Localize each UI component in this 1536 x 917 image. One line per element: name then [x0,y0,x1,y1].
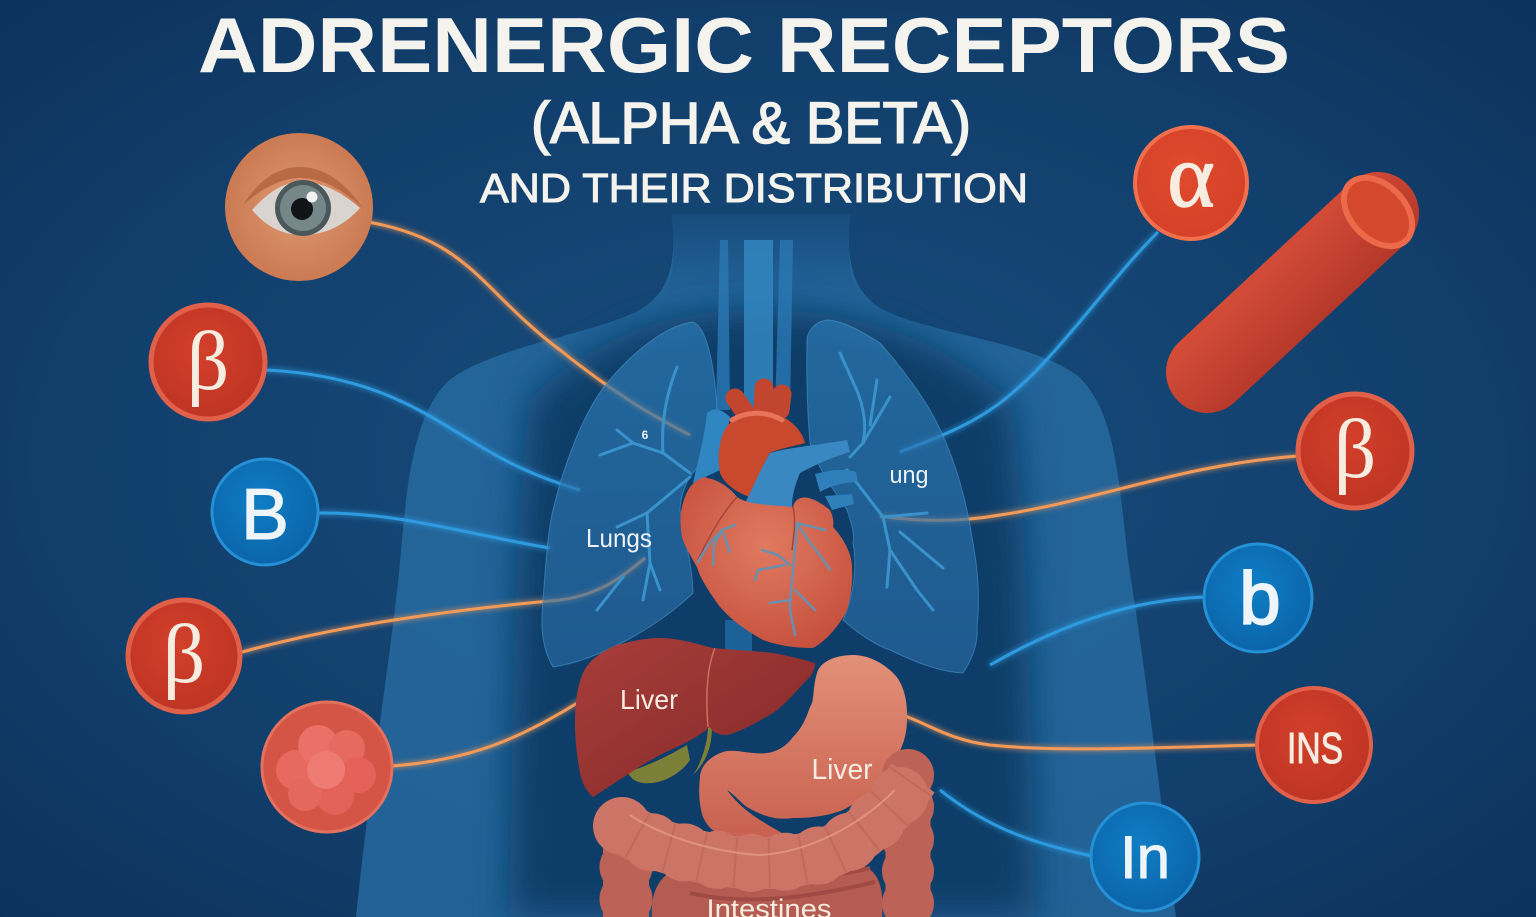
icon: beta badge left 3 [128,600,240,712]
connector: In right [940,790,1092,856]
icon: blood vessel [1207,160,1430,372]
icon: In badge [1091,803,1199,911]
connector: alpha [900,232,1158,452]
icon: INS badge: INS [1287,724,1343,773]
icon: In badge: In [1120,824,1170,891]
icon: beta badge left 1 [151,305,265,419]
connector: beta right [880,456,1298,520]
connector: INS right [905,716,1256,749]
icon: b badge right: b [1239,557,1281,640]
icon: alpha badge: α [1167,127,1215,226]
connector: b right [990,597,1204,665]
icon: b badge right [1204,544,1312,652]
label: liver: Liver [620,684,678,715]
stomach [699,655,907,840]
connector: beta left 3 [242,558,645,652]
icon: INS badge [1257,688,1371,802]
left lung [542,322,717,667]
icon: beta badge left blue [212,459,318,565]
icon: beta badge left 1: β [187,315,229,408]
label: lungs: Lungs [586,523,652,553]
human torso silhouette [356,214,1176,917]
title: ADRENERGIC RECEPTORS [198,1,1290,89]
icon: beta badge left 3: β [163,608,205,701]
label: ung: ung [890,462,928,489]
icon: beta badge right [1298,394,1412,508]
connector: beta left 2 [318,513,550,548]
connector: pancreas [392,695,590,766]
connector: beta left 1 [266,370,580,490]
tagline: AND THEIR DISTRIBUTION [480,165,1028,211]
label: liver on stomach: Liver [812,754,873,786]
intestines [622,775,913,917]
connector: eye [368,222,690,435]
icon: pancreas tissue [262,702,392,832]
heart [680,388,858,648]
icon: eye [225,133,373,281]
icon: beta badge left blue: B [241,475,289,555]
right lung [807,320,978,673]
label: small 6: 6 [642,428,649,442]
icon: alpha badge [1135,127,1247,239]
icon: beta badge right: β [1334,403,1376,496]
subtitle: (ALPHA & BETA) [531,91,971,156]
liver [575,638,815,797]
